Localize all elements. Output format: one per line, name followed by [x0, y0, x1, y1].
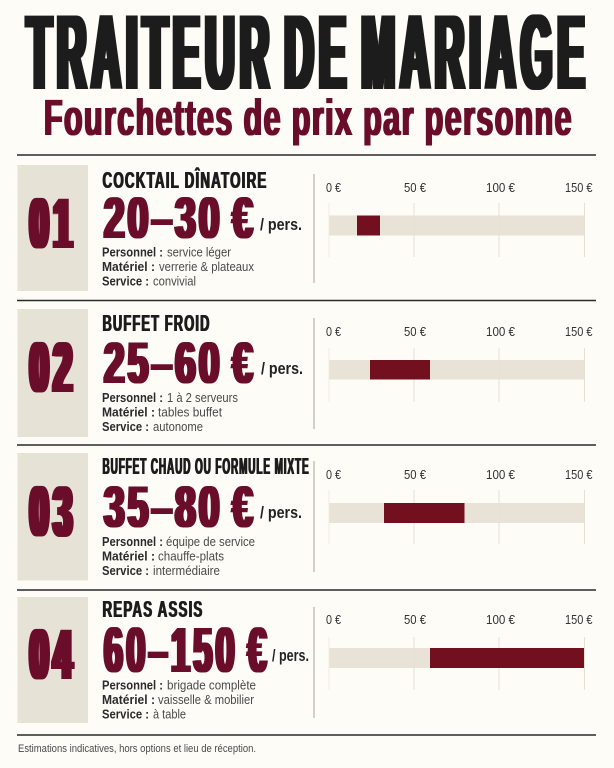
range chart: 0 € [326, 181, 341, 195]
number box 02 [18, 309, 88, 437]
details: brigade complète [167, 678, 256, 692]
heading: BUFFET FROID [102, 310, 210, 336]
number box 04: 04 [30, 616, 77, 695]
price: 35–80 € [104, 475, 256, 540]
details: Service : [102, 708, 149, 722]
panel: buffet chaud ou formule mixte: BUFFET CHAUD OU FORMULE MIXTE [102, 453, 310, 479]
panel: buffet chaud ou formule mixte [18, 453, 593, 580]
details: autonome [153, 420, 203, 434]
details: tables buffet [158, 406, 222, 420]
details: Personnel : [102, 246, 163, 260]
details [102, 391, 238, 434]
number box 02: 02 [30, 329, 77, 408]
heading: COCKTAIL DÎNATOIRE [102, 166, 268, 193]
range chart [326, 325, 593, 402]
range chart [326, 613, 593, 690]
range chart: 100 € [486, 325, 515, 339]
range chart [326, 468, 593, 544]
details [102, 535, 255, 578]
details [102, 246, 255, 288]
unit: / pers. [260, 215, 302, 234]
details: à table [153, 708, 186, 722]
panel: cocktail dînatoire [18, 165, 593, 291]
heading: REPAS ASSIS [102, 596, 204, 622]
details: Personnel : [102, 391, 163, 405]
price: 25–60 € [104, 331, 256, 396]
details: Matériel : [102, 406, 155, 420]
range chart: 0 € [326, 325, 341, 339]
range chart: 150 € [565, 325, 593, 339]
details: verrerie & plateaux [159, 260, 255, 274]
range chart: 0 € [326, 468, 341, 482]
range chart: 150 € [565, 468, 593, 482]
details: service léger [167, 246, 231, 260]
details: Service : [102, 274, 149, 288]
details: Service : [102, 564, 149, 578]
range chart: 50 € [404, 181, 426, 195]
number box 03: 03 [30, 473, 77, 552]
details: convivial [153, 274, 196, 288]
details: vaisselle & mobilier [158, 693, 254, 707]
unit: / pers. [272, 646, 309, 665]
details: intermédiaire [153, 564, 220, 578]
details: Service : [102, 420, 149, 434]
range chart: 150 € [565, 181, 593, 195]
unit: / pers. [261, 359, 303, 378]
price: 60–150 € [104, 614, 270, 686]
panel: repas assis [18, 596, 593, 723]
footnote: Estimations indicatives, hors options et lieu de réception. [18, 743, 256, 755]
panel: buffet froid [18, 309, 593, 437]
number box 04 [18, 597, 88, 723]
details: Matériel : [102, 260, 155, 274]
range chart: 100 € [486, 468, 515, 482]
number box 01: 01 [30, 185, 77, 264]
details: chauffe-plats [158, 550, 224, 564]
unit: / pers. [260, 503, 302, 522]
range chart: 50 € [404, 468, 426, 482]
range chart: 50 € [404, 613, 426, 627]
details: Personnel : [102, 678, 163, 692]
range chart [326, 181, 593, 257]
price: 20–30 € [104, 186, 256, 251]
number box 03 [18, 453, 88, 580]
details: Matériel : [102, 550, 155, 564]
details: Personnel : [102, 535, 163, 549]
details: équipe de service [166, 535, 255, 549]
range chart: 100 € [486, 181, 515, 195]
range chart: 50 € [404, 325, 426, 339]
range chart: 100 € [486, 613, 515, 627]
details: Matériel : [102, 693, 155, 707]
range chart: 150 € [565, 613, 593, 627]
details: 1 à 2 serveurs [167, 391, 238, 405]
range chart: 0 € [326, 613, 341, 627]
details [102, 678, 256, 722]
number box 01 [18, 165, 88, 291]
